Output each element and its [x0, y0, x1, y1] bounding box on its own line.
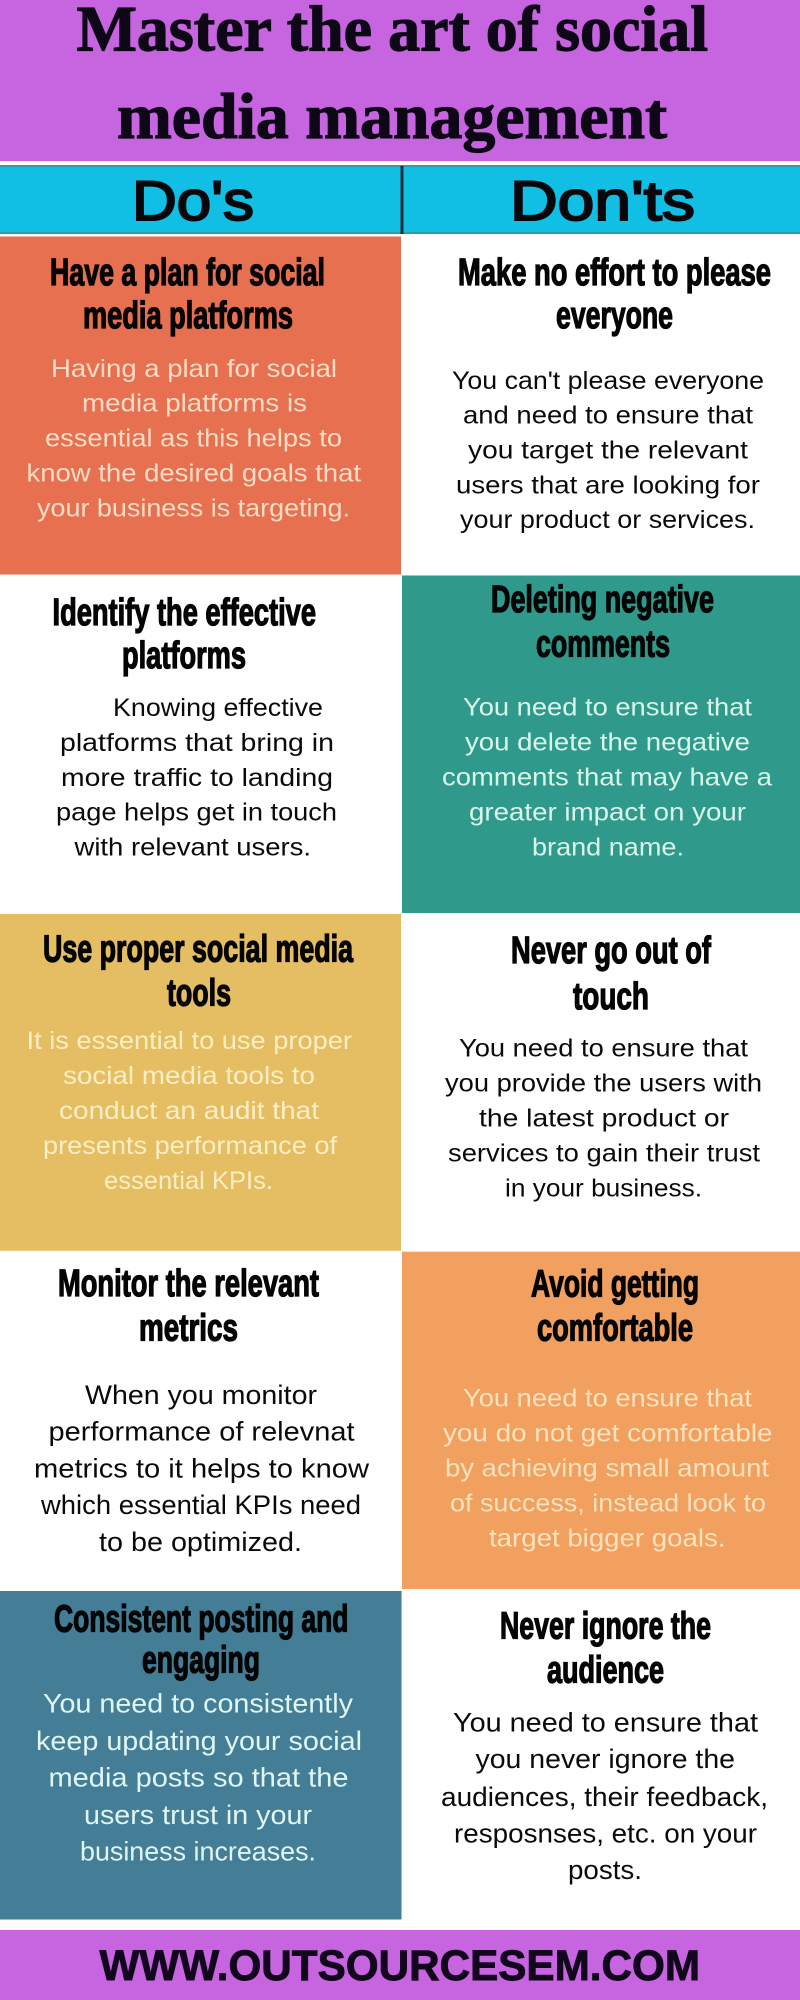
panel body text: essential as this helps to: [45, 424, 342, 452]
panel body text: You need to ensure that: [463, 694, 752, 722]
footer website text: WWW.OUTSOURCESEM.COM: [100, 1942, 700, 1990]
panel body text: You need to consistently: [43, 1689, 354, 1719]
panel body text: [26, 1027, 352, 1195]
footer banner: [0, 1930, 800, 2000]
panel: Use proper social media tools: [0, 914, 401, 1251]
panel body text: posts.: [568, 1855, 642, 1885]
heading: Do's: Do's: [132, 169, 254, 232]
panel body text: [36, 1689, 362, 1867]
panel heading: everyone: [556, 295, 673, 337]
panel body text: media posts so that the: [48, 1763, 348, 1793]
panel body text: the latest product or: [479, 1105, 729, 1133]
column header band: [0, 165, 800, 234]
panel heading: comments: [536, 624, 670, 666]
panel body text: Knowing effective: [113, 694, 323, 722]
panel body text: know the desired goals that: [26, 460, 361, 488]
panel body text: your business is targeting.: [37, 494, 350, 522]
panel heading: [531, 1264, 699, 1350]
panel body text: [445, 1035, 762, 1203]
panel body text: comments that may have a: [442, 764, 772, 792]
panel body text: [56, 694, 337, 862]
panel body text: you provide the users with: [445, 1070, 762, 1098]
panel body text: performance of relevnat: [48, 1417, 355, 1447]
title banner: [0, 0, 800, 161]
panel: Make no effort: [402, 236, 800, 574]
panel heading: comfortable: [537, 1308, 693, 1350]
panel body text: business increases.: [80, 1837, 316, 1867]
panel heading: Never go out of: [511, 930, 711, 972]
panel body text: media platforms is: [82, 390, 307, 418]
panel heading: Monitor the relevant: [58, 1263, 319, 1305]
panel body text: It is essential to use proper: [26, 1027, 352, 1055]
panel: Avoid getting comfortable: [402, 1252, 800, 1589]
panel: Never ignore the audience: [402, 1590, 800, 1920]
panel heading: [52, 592, 316, 677]
panel heading: tools: [167, 973, 231, 1015]
panel body text: and need to ensure that: [463, 402, 753, 430]
panel body text: brand name.: [532, 834, 684, 862]
panel body text: greater impact on your: [469, 799, 746, 827]
panel body text: more traffic to landing: [61, 764, 333, 792]
panel heading: [500, 1605, 711, 1691]
title: [76, 0, 708, 153]
panel body text: you target the relevant: [468, 436, 748, 464]
panel body text: services to gain their trust: [448, 1140, 760, 1168]
panel heading: [58, 1263, 319, 1350]
panel heading: [50, 252, 325, 337]
panel heading: engaging: [142, 1640, 260, 1682]
panel heading: Avoid getting: [531, 1264, 699, 1306]
panel body text: in your business.: [505, 1175, 702, 1203]
panel body text: you delete the negative: [465, 729, 750, 757]
panel body text: social media tools to: [63, 1062, 315, 1090]
panel body text: [452, 367, 764, 534]
panel body text: You need to ensure that: [453, 1708, 759, 1738]
panel body text: target bigger goals.: [489, 1525, 726, 1553]
panel heading: [511, 930, 711, 1018]
panel heading: platforms: [122, 635, 246, 677]
panel body text: [34, 1380, 370, 1557]
heading: Don'ts: Don'ts: [510, 169, 695, 232]
panel: Deleting negative comments: [402, 576, 800, 913]
panel body text: presents performance of: [43, 1132, 337, 1160]
panel body text: with relevant users.: [73, 834, 311, 862]
panel body text: platforms that bring in: [60, 729, 334, 757]
panel body text: you never ignore the: [476, 1744, 735, 1774]
panel heading: [458, 252, 771, 337]
panel: Identify the effective platforms: [0, 575, 401, 914]
panel heading: touch: [573, 976, 649, 1018]
panel body text: Having a plan for social: [51, 355, 337, 383]
panel heading: Deleting negative: [491, 579, 714, 621]
panel body text: You can't please everyone: [452, 367, 764, 395]
panel heading: Have a plan for social: [50, 252, 325, 294]
panel body text: users trust in your: [84, 1800, 312, 1830]
panel body text: You need to ensure that: [463, 1385, 752, 1413]
panel body text: you do not get comfortable: [443, 1420, 772, 1448]
panel body text: [443, 1385, 772, 1553]
panel body text: of success, instead look to: [450, 1490, 766, 1518]
panel body text: to be optimized.: [99, 1527, 302, 1557]
panel heading: Consistent posting and: [54, 1599, 348, 1641]
panel heading: Use proper social media: [43, 929, 354, 971]
panel body text: page helps get in touch: [56, 799, 337, 827]
panel body text: You need to ensure that: [459, 1035, 748, 1063]
panel: Never go out of touch: [402, 913, 800, 1251]
panel heading: audience: [547, 1649, 664, 1691]
panel body text: metrics to it helps to know: [34, 1454, 370, 1484]
panel heading: metrics: [139, 1308, 238, 1350]
panel body text: by achieving small amount: [445, 1455, 769, 1483]
panel heading: [54, 1599, 348, 1682]
panel body text: which essential KPIs need: [40, 1490, 361, 1520]
panel body text: When you monitor: [85, 1380, 317, 1410]
panel: Have a plan: [0, 236, 401, 574]
panel heading: [43, 929, 354, 1015]
panel body text: [26, 355, 361, 522]
panel heading: Never ignore the: [500, 1605, 711, 1647]
panel body text: resposnses, etc. on your: [454, 1819, 757, 1849]
title: media management: [117, 81, 667, 153]
panel body text: your product or services.: [460, 506, 755, 534]
panel body text: users that are looking for: [456, 472, 760, 500]
panel body text: audiences, their feedback,: [441, 1782, 768, 1812]
panel body text: essential KPIs.: [104, 1167, 273, 1195]
panel heading: [491, 579, 714, 666]
panel heading: media platforms: [83, 295, 293, 337]
panel body text: [442, 694, 772, 862]
panel body text: keep updating your social: [36, 1726, 362, 1756]
panel body text: [441, 1708, 768, 1885]
panel: Consistent posting and engaging: [0, 1591, 402, 1920]
panel heading: Identify the effective: [52, 592, 316, 634]
panel: Monitor the relevant metrics: [0, 1251, 401, 1591]
panel body text: conduct an audit that: [59, 1097, 319, 1125]
